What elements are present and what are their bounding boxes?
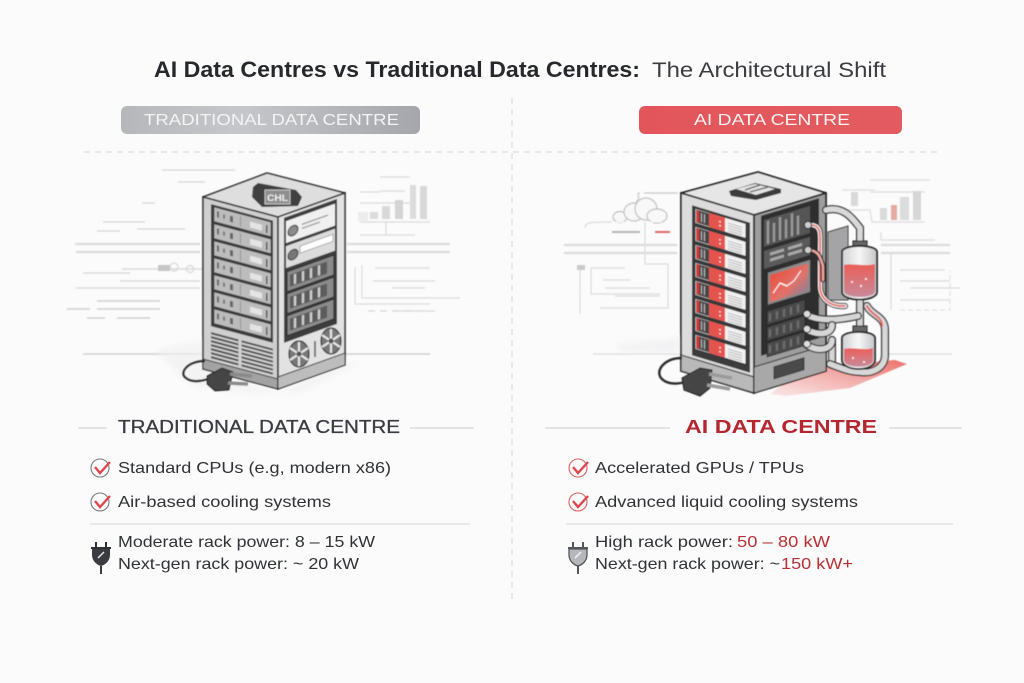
chip: CHL (267, 193, 288, 204)
section heading: traditional: TRADITIONAL DATA CENTRE (118, 417, 400, 437)
AI feature list (566, 459, 953, 574)
icon: plug (91, 542, 111, 574)
dashed dividers (84, 98, 940, 600)
AI feature list: 150 kW+ (781, 556, 853, 573)
liquid cooling loop (807, 209, 885, 372)
traditional feature list: Moderate rack power: 8 – 15 kW (118, 534, 376, 551)
right background schematic (564, 180, 960, 354)
left face (203, 197, 278, 389)
right face (754, 193, 826, 393)
fan 1 (289, 341, 309, 367)
illustration: traditional server tower (155, 173, 362, 393)
title: AI Data Centres vs Traditional Data Centres: (154, 57, 640, 82)
section heading: AI: AI DATA CENTRE (685, 417, 877, 437)
badge: traditional data centre: TRADITIONAL DATA CENTRE (144, 112, 399, 129)
icon: check 2 (91, 493, 110, 511)
title: The Architectural Shift (652, 58, 886, 82)
fan 2 (321, 328, 341, 354)
icon: check 1 (569, 459, 588, 477)
tower top (203, 173, 345, 217)
red coolant floor glow (770, 360, 907, 396)
power cord and plug (183, 361, 252, 391)
icon: plug (568, 542, 588, 574)
traditional feature list: Standard CPUs (e.g, modern x86) (118, 460, 391, 477)
icon: check 1 (91, 459, 110, 477)
badge: AI data centre: AI DATA CENTRE (694, 112, 850, 129)
left face (681, 193, 754, 393)
traditional feature list: Air-based cooling systems (118, 494, 331, 511)
AI feature list: Next-gen rack power: ~ (595, 556, 780, 573)
badge: traditional data centre (121, 106, 420, 134)
right face (278, 193, 345, 389)
tower top (681, 172, 826, 215)
upper coolant tank (842, 241, 877, 300)
traditional feature list (90, 459, 470, 574)
chip (252, 183, 302, 207)
lower coolant tank (842, 326, 875, 369)
chip (729, 183, 781, 200)
illustration: AI server tower (615, 172, 907, 396)
AI feature list: Advanced liquid cooling systems (595, 494, 858, 511)
vent grille (211, 333, 273, 374)
ground shadow (155, 340, 362, 393)
AI feature list: High rack power: (595, 534, 733, 551)
icon: check 2 (569, 493, 588, 511)
icon: cloud (613, 198, 667, 223)
left background schematic (67, 170, 460, 354)
power cord and plug (659, 358, 732, 396)
AI feature list: 50 – 80 kW (737, 534, 831, 551)
monitor with chart (768, 260, 810, 305)
AI feature list: Accelerated GPUs / TPUs (595, 460, 804, 477)
badge: AI data centre (639, 106, 902, 134)
traditional feature list: Next-gen rack power: ~ 20 kW (118, 556, 360, 573)
title (154, 57, 886, 82)
